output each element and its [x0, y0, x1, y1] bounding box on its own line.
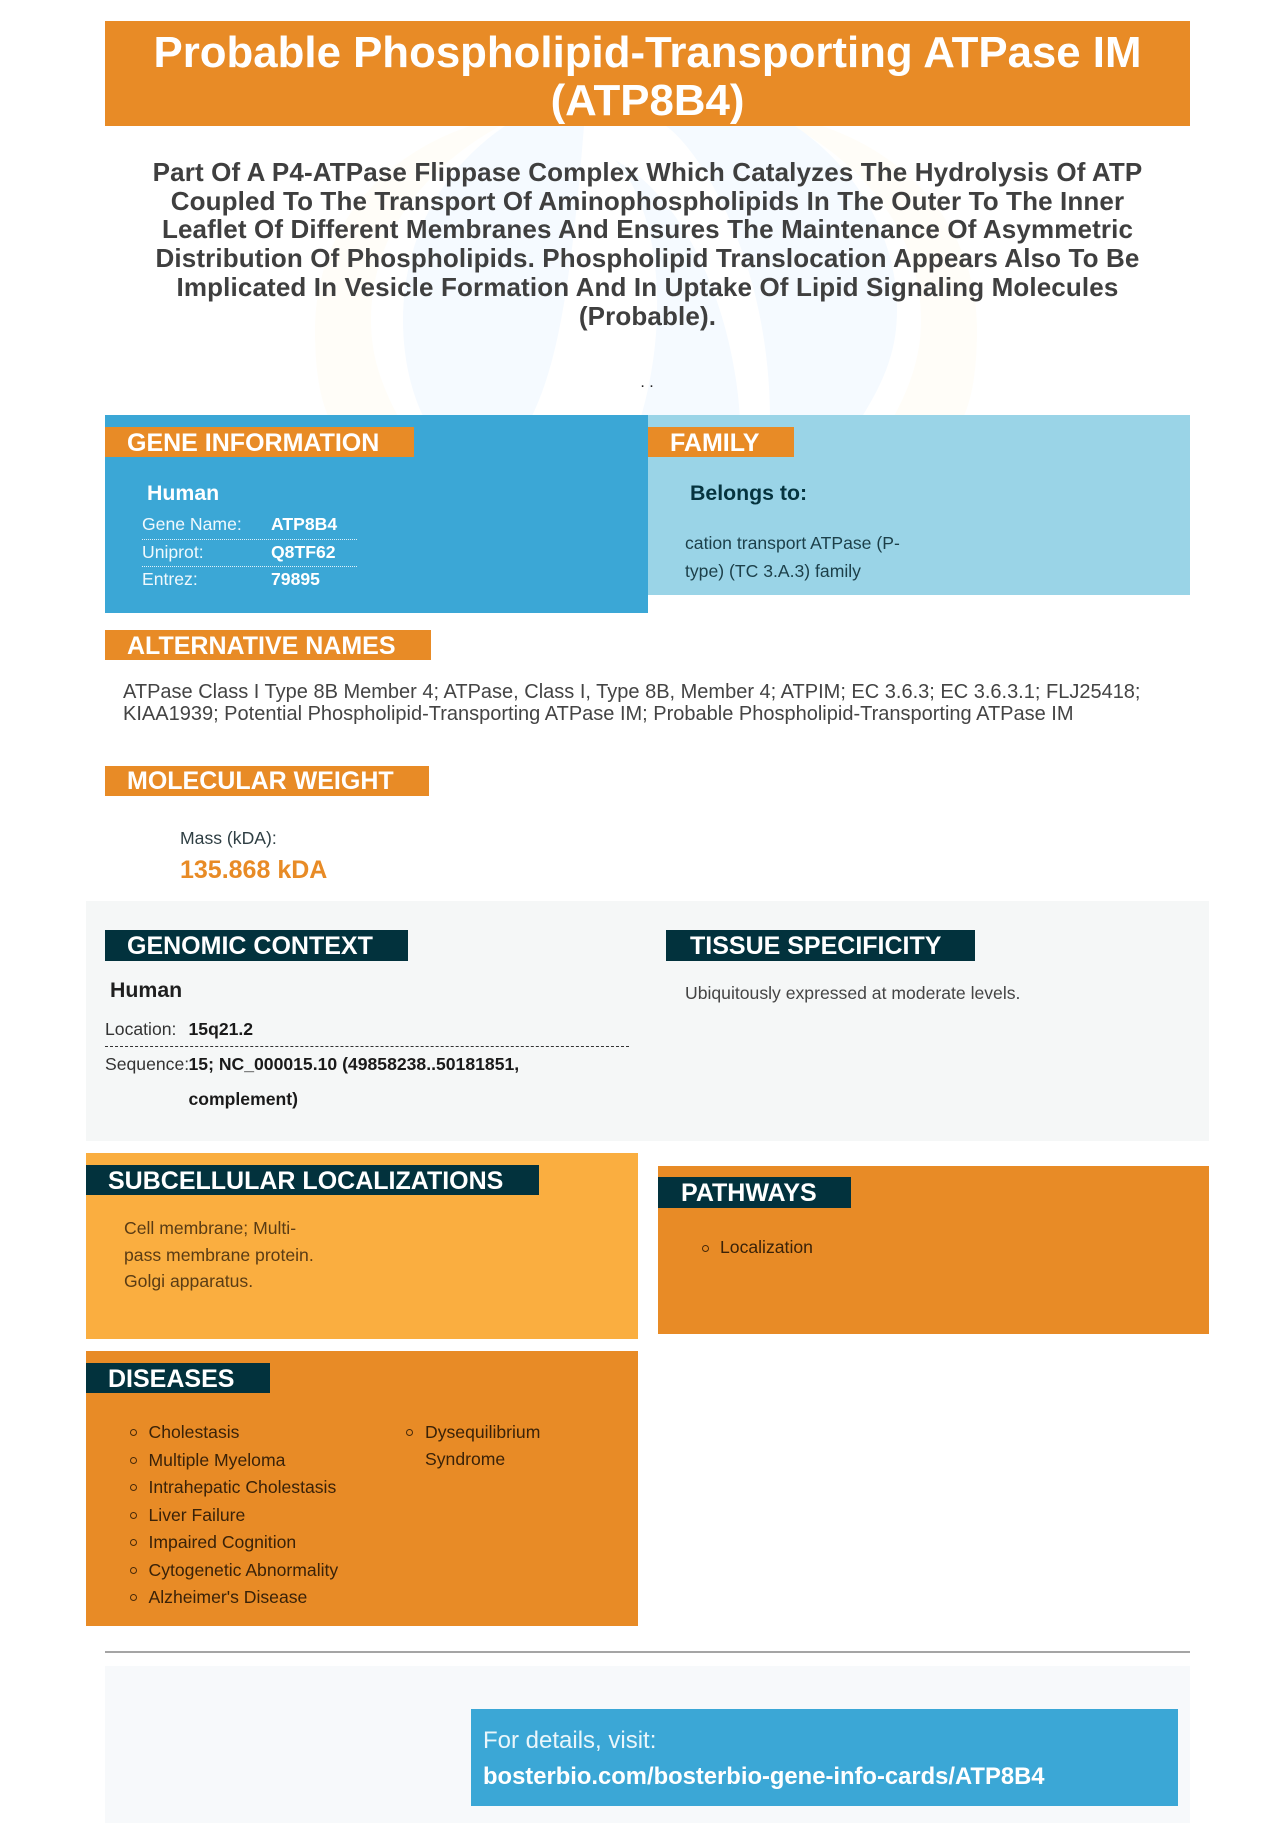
- panel: gene information: [105, 415, 648, 613]
- description text: Distribution Of Phospholipids. Phospholipid Translocation Appears Also To Be: [156, 243, 1139, 273]
- heading: diseases: DISEASES: [108, 1365, 234, 1393]
- disease name: Liver Failure: [148, 1505, 245, 1525]
- heading: family: [648, 427, 794, 457]
- heading: gene information: GENE INFORMATION: [127, 429, 379, 457]
- location label: Location:: [105, 1019, 176, 1039]
- species label: Human: [110, 978, 182, 1002]
- species label: Human: [147, 481, 219, 505]
- panel: diseases: [86, 1351, 638, 1626]
- belongs to label: Belongs to:: [690, 481, 807, 505]
- item: [406, 1429, 413, 1436]
- disease name: Cholestasis: [148, 1422, 239, 1442]
- item: [130, 1512, 137, 1519]
- sequence label: Sequence:: [105, 1054, 189, 1074]
- localization text: Golgi apparatus.: [124, 1271, 253, 1291]
- entrez value: 79895: [271, 569, 320, 589]
- mass value: 135.868 kDA: [180, 856, 327, 884]
- heading: diseases: [86, 1363, 270, 1393]
- sequence value: complement): [188, 1088, 298, 1108]
- item: [130, 1429, 137, 1436]
- heading: pathways: PATHWAYS: [681, 1179, 817, 1207]
- item: [130, 1539, 137, 1546]
- heading: pathways: [658, 1177, 851, 1208]
- title banner: [105, 21, 1190, 126]
- panel: pathways: [655, 1166, 1209, 1334]
- heading: molecular weight: MOLECULAR WEIGHT: [127, 767, 394, 795]
- description text: (Probable).: [579, 301, 716, 331]
- disease name: Impaired Cognition: [148, 1532, 296, 1552]
- divider: [105, 1651, 1190, 1653]
- localization text: Cell membrane; Multi-: [124, 1218, 296, 1238]
- disease list column 2: [406, 1422, 540, 1469]
- family text: type) (TC 3.A.3) family: [685, 561, 861, 581]
- heading: genomic context: GENOMIC CONTEXT: [127, 932, 373, 960]
- panel: genomic context and tissue specificity: [86, 901, 1209, 1141]
- gene name value: ATP8B4: [271, 514, 337, 534]
- call to action url: bosterbio.com/bosterbio-gene-info-cards/ATP8B4: [483, 1763, 1044, 1790]
- panel: family: [648, 415, 1190, 595]
- family text: cation transport ATPase (P-: [685, 533, 900, 553]
- call to action box: [471, 1709, 1178, 1806]
- disease name: Multiple Myeloma: [148, 1450, 285, 1470]
- heading: tissue specificity: TISSUE SPECIFICITY: [690, 932, 941, 960]
- disease name: Dysequilibrium: [425, 1422, 540, 1442]
- localization text: pass membrane protein.: [124, 1244, 314, 1264]
- description text: Part Of A P4-ATPase Flippase Complex Which Catalyzes The Hydrolysis Of ATP: [153, 157, 1142, 187]
- heading: subcellular localizations: SUBCELLULAR LOCALIZATIONS: [108, 1167, 503, 1195]
- title text: [154, 28, 1141, 125]
- watermark logo: [403, 126, 897, 415]
- description text: Coupled To The Transport Of Aminophospholipids In The Outer To The Inner: [171, 186, 1124, 216]
- localization text: [124, 1218, 314, 1291]
- sequence value: [188, 1054, 519, 1108]
- gene name row: [142, 512, 357, 540]
- tissue specificity text: Ubiquitously expressed at moderate levels.: [685, 983, 1020, 1003]
- sequence row: [105, 1054, 519, 1108]
- alternative names text: [123, 680, 1140, 724]
- pathway name: Localization: [720, 1237, 813, 1257]
- uniprot label: Uniprot:: [142, 542, 204, 562]
- title text: (ATP8B4): [551, 76, 744, 125]
- description text: [153, 157, 1142, 331]
- uniprot value: Q8TF62: [271, 542, 336, 562]
- sequence value: 15; NC_000015.10 (49858238..50181851,: [188, 1054, 519, 1074]
- separator dots: . .: [640, 374, 654, 391]
- pathway item: [702, 1240, 812, 1253]
- item: [130, 1594, 137, 1601]
- disease name: Intrahepatic Cholestasis: [148, 1477, 336, 1497]
- description text: Implicated In Vesicle Formation And In Uptake Of Lipid Signaling Molecules: [177, 272, 1118, 302]
- location row: [105, 1017, 629, 1047]
- family text: [685, 533, 900, 581]
- panel: subcellular localizations: [86, 1153, 638, 1339]
- heading: family: FAMILY: [670, 429, 759, 457]
- location value: 15q21.2: [188, 1019, 253, 1039]
- disease name: Syndrome: [425, 1449, 505, 1469]
- alternative names text: ATPase Class I Type 8B Member 4; ATPase, Class I, Type 8B, Member 4; ATPIM; EC 3.6.3; EC 3.6.3.1; FLJ25418;: [123, 680, 1140, 702]
- heading: alternative names: ALTERNATIVE NAMES: [127, 632, 396, 660]
- uniprot row: [142, 540, 357, 567]
- disease list column 1: [130, 1422, 338, 1607]
- disease name: Cytogenetic Abnormality: [148, 1560, 338, 1580]
- description text: Leaflet Of Different Membranes And Ensures The Maintenance Of Asymmetric: [162, 214, 1133, 244]
- footer panel: [105, 1666, 1190, 1823]
- item: [130, 1457, 137, 1464]
- bullet: [702, 1245, 709, 1252]
- alternative names text: KIAA1939; Potential Phospholipid-Transporting ATPase IM; Probable Phospholipid-Transporting ATPase IM: [123, 702, 1074, 724]
- entrez label: Entrez:: [142, 569, 198, 589]
- item: [130, 1567, 137, 1574]
- entrez row: [142, 569, 320, 589]
- disease name: Alzheimer's Disease: [148, 1587, 307, 1607]
- call to action label: For details, visit:: [483, 1727, 656, 1754]
- disease name: [425, 1422, 540, 1469]
- gene name label: Gene Name:: [142, 514, 242, 534]
- title text: Probable Phospholipid-Transporting ATPase IM: [154, 28, 1141, 77]
- item: [130, 1484, 137, 1491]
- mass label: Mass (kDA):: [180, 828, 277, 848]
